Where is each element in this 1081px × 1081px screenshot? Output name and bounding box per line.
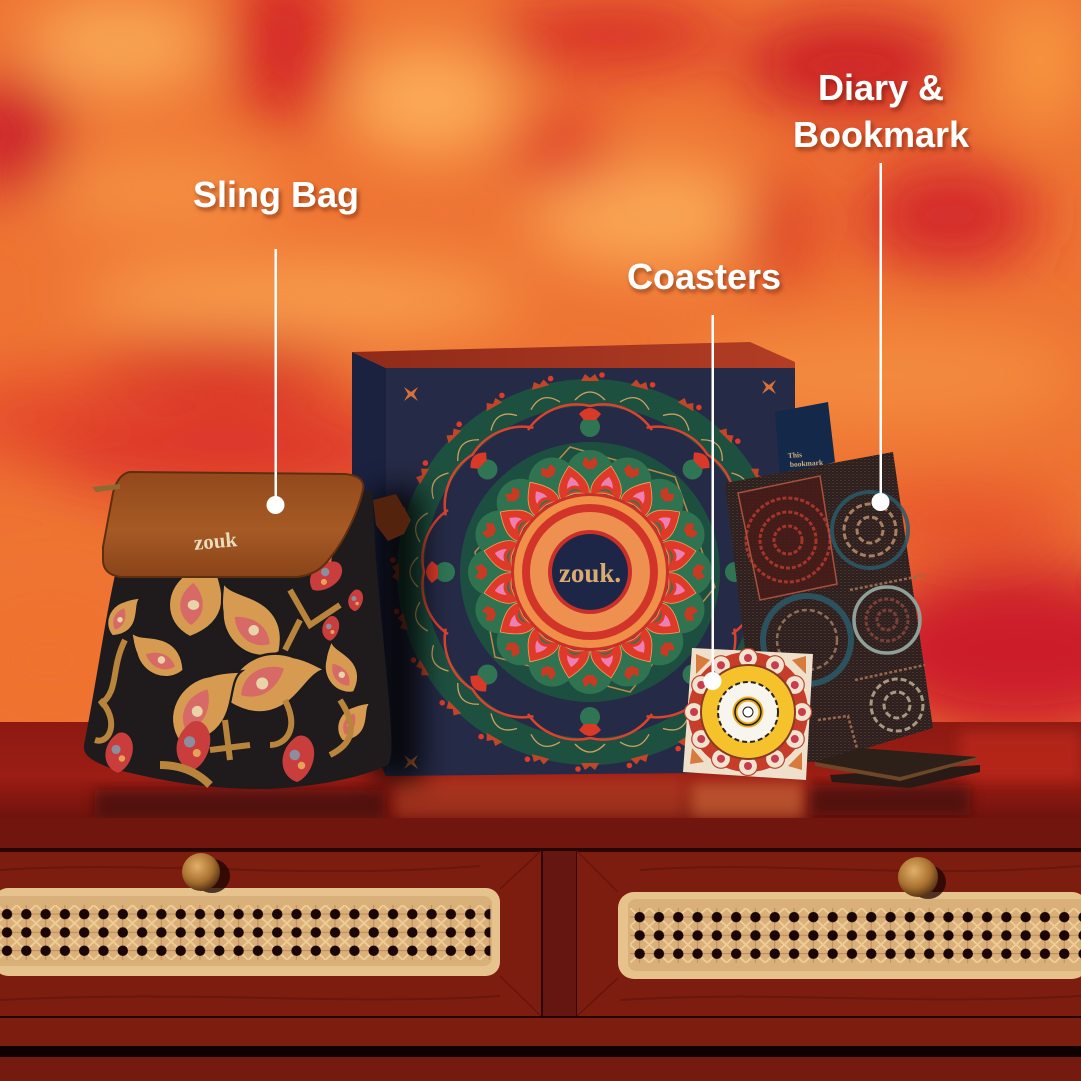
- bookmark: This: [788, 450, 802, 460]
- right knob: [898, 857, 946, 899]
- sling bag: [84, 472, 411, 789]
- bottom rail: [0, 1017, 1081, 1046]
- callout: diary and bookmark: Diary &: [818, 67, 944, 108]
- standing coaster: [683, 648, 813, 780]
- sideboard with two cane drawers: [0, 818, 1081, 1081]
- mandala artwork: [390, 372, 790, 772]
- callout: coasters: [627, 256, 781, 690]
- paisley print: [95, 554, 372, 785]
- flap logo: zouk: [193, 527, 238, 555]
- diary: [725, 452, 933, 762]
- bag shadow on box: [372, 490, 422, 780]
- left knob: [182, 853, 230, 893]
- centre post: [543, 851, 576, 1017]
- bag body: [84, 490, 391, 789]
- bookmark: is yours: [790, 467, 815, 478]
- strap tie: [373, 494, 411, 541]
- decorative box corner stars: [404, 380, 776, 769]
- callout: coasters: Coasters: [627, 256, 781, 297]
- leather flap: [103, 472, 363, 577]
- bookmark: bookmark: [790, 458, 824, 469]
- left drawer: [0, 851, 542, 1017]
- bookmark: [775, 402, 835, 478]
- callout: sling bag: Sling Bag: [193, 174, 359, 215]
- stacked coasters on table: [815, 748, 980, 788]
- callout: diary and bookmark: [793, 67, 970, 511]
- logo: zouk.: [559, 558, 621, 588]
- gift box with mandala: [352, 342, 795, 780]
- table top with reflection: [0, 722, 1081, 820]
- right drawer: [576, 851, 1081, 1017]
- zip pull: [92, 484, 120, 492]
- callout: diary and bookmark: Bookmark: [793, 114, 970, 155]
- callout: sling bag: [193, 174, 359, 514]
